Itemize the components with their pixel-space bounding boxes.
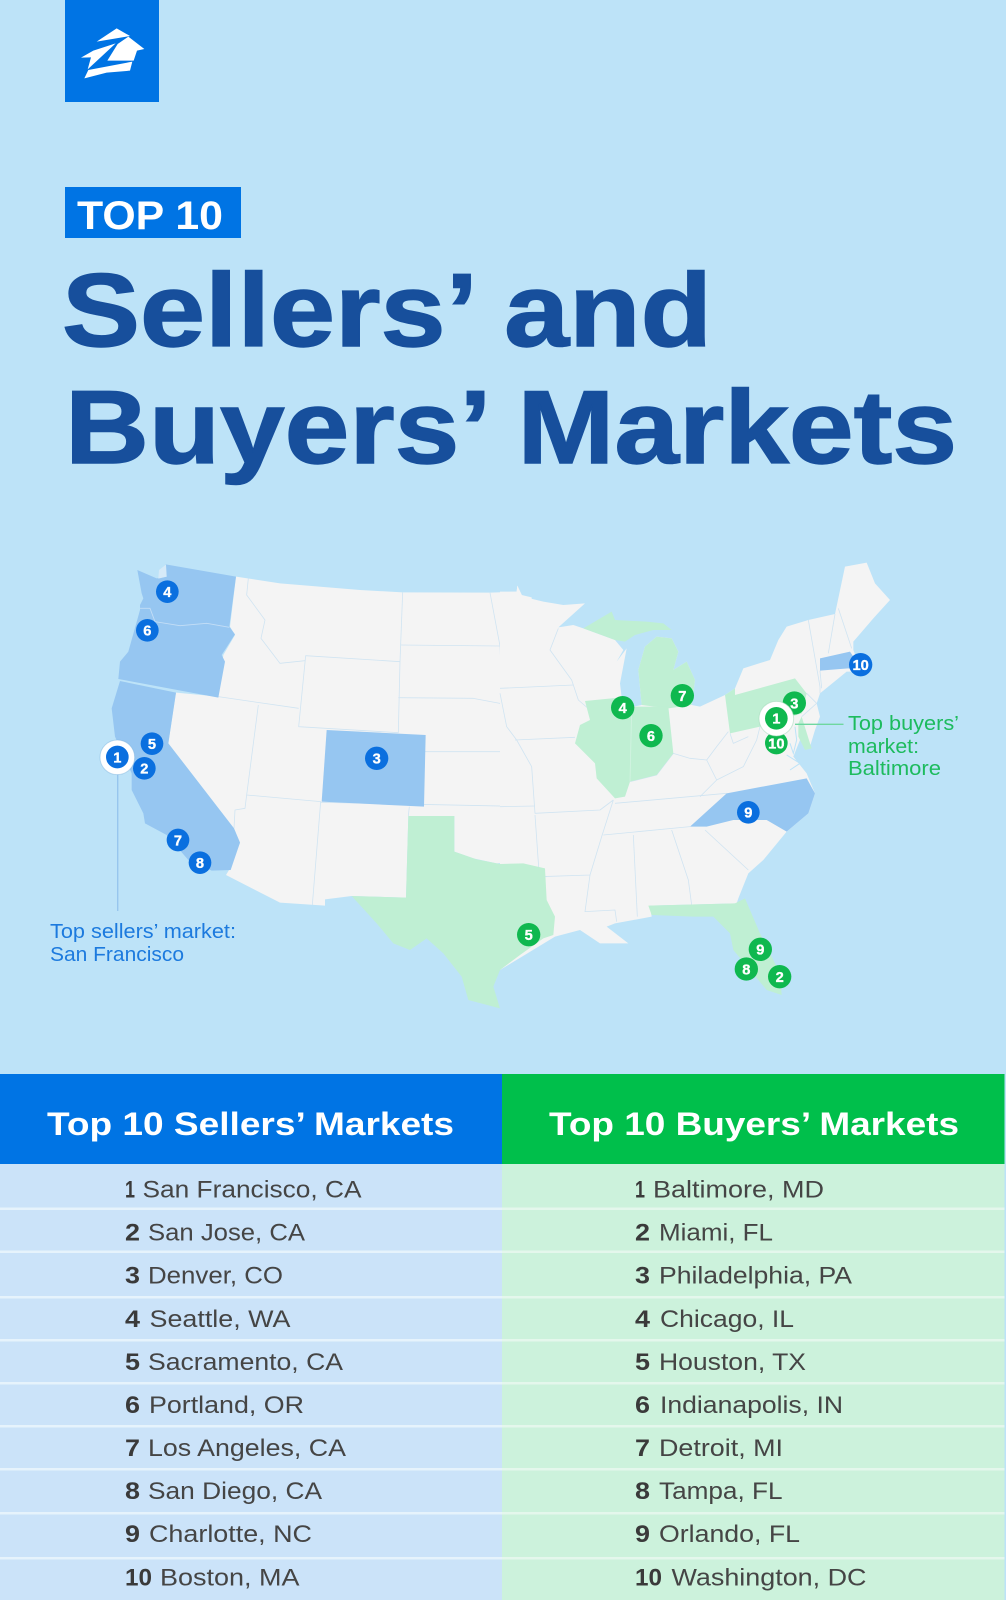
pins: buyers' markets: 1	[772, 712, 780, 728]
pins: sellers' markets: 4	[163, 585, 172, 601]
pins: sellers' markets: 6	[143, 624, 151, 640]
pins: sellers' markets: 5	[148, 737, 156, 753]
list: sellers' markets: 4	[125, 1306, 141, 1333]
list: sellers' markets: San Jose, CA	[148, 1220, 305, 1246]
panel: top 10 sellers' markets table	[0, 1074, 502, 1600]
list: sellers' markets: Charlotte, NC	[149, 1521, 312, 1548]
heading: sellers: Top 10 Sellers’ Markets	[47, 1106, 454, 1142]
map: western states	[112, 564, 532, 906]
list: buyers' markets: Indianapolis, IN	[660, 1392, 843, 1419]
pins: buyers' markets: 3	[790, 696, 798, 712]
heading: buyers: Top 10 Buyers’ Markets	[549, 1106, 959, 1142]
list: buyers' markets: 8	[635, 1478, 650, 1505]
callout line: top sellers' market	[117, 773, 119, 911]
state: Washington and Oregon	[118, 564, 236, 698]
pins: sellers' markets: 8	[196, 856, 204, 872]
pins: eastern sellers' markets	[737, 653, 872, 824]
callout label: top buyers' market: market:	[848, 736, 919, 758]
list: sellers' markets	[125, 1176, 362, 1592]
pins: sellers' markets	[100, 580, 388, 874]
heading: buyers	[502, 1074, 1004, 1164]
state: North Carolina	[690, 778, 815, 832]
list: buyers' markets: Houston, TX	[659, 1349, 806, 1376]
callout line: top buyers' market	[795, 723, 844, 725]
list: sellers' markets: 10	[125, 1564, 152, 1592]
pins: buyers' markets: 5	[525, 928, 533, 944]
pins: buyers' markets: 9	[756, 943, 764, 959]
map: eastern states	[500, 563, 890, 995]
list: sellers' markets: 5	[125, 1349, 140, 1376]
pins: eastern sellers' markets: 10	[853, 658, 869, 674]
list: buyers' markets: Detroit, MI	[659, 1435, 783, 1462]
badge: TOP 10: TOP 10	[77, 194, 223, 238]
list: buyers' markets: 7	[635, 1435, 650, 1462]
state: Texas	[352, 816, 555, 1008]
list: sellers' markets: Seattle, WA	[150, 1306, 290, 1333]
pins: buyers' markets: 4	[619, 701, 628, 717]
state: Delaware and eastern Maryland	[798, 717, 812, 750]
list: sellers' markets: Sacramento, CA	[148, 1349, 343, 1376]
map of the United States	[50, 563, 959, 1008]
list: buyers' markets: 2	[635, 1220, 650, 1246]
state: Pennsylvania	[725, 678, 807, 733]
logo: Zillow house Z	[65, 0, 159, 102]
list: buyers' markets: 1	[635, 1176, 645, 1204]
pins: sellers' markets: 3	[373, 752, 381, 768]
list: sellers' markets: 2	[125, 1220, 140, 1246]
state: Massachusetts	[820, 652, 860, 671]
pins: buyers' markets: 10	[768, 736, 784, 752]
list: sellers' markets: Denver, CO	[148, 1262, 283, 1290]
list: sellers' markets: San Diego, CA	[148, 1478, 322, 1505]
state: Colorado	[322, 730, 426, 807]
list: buyers' markets: Tampa, FL	[659, 1478, 782, 1505]
callout label: top sellers' market: Top sellers’ market:	[50, 921, 236, 943]
list: sellers' markets: 1	[125, 1176, 135, 1204]
list: buyers' markets: Miami, FL	[659, 1220, 773, 1246]
list: sellers' markets: Los Angeles, CA	[148, 1435, 346, 1462]
list: buyers' markets: Baltimore, MD	[653, 1176, 824, 1204]
callout label: top buyers' market	[848, 713, 959, 780]
list: buyers' markets: 3	[635, 1262, 650, 1290]
list: sellers' markets: 7	[125, 1435, 140, 1462]
callout label: top sellers' market: San Francisco	[50, 944, 184, 966]
list: sellers' markets: Boston, MA	[160, 1564, 300, 1592]
list: buyers' markets: 9	[635, 1521, 650, 1548]
panel: top 10 buyers' markets table	[502, 1074, 1004, 1600]
list: sellers' markets: Portland, OR	[149, 1392, 304, 1419]
list: buyers' markets: Washington, DC	[672, 1564, 866, 1592]
title	[62, 253, 957, 486]
pins: buyers' markets: 7	[678, 689, 686, 705]
state: Florida	[648, 898, 782, 995]
list: buyers' markets: 10	[635, 1564, 662, 1592]
state: Michigan lower peninsula	[638, 637, 695, 708]
title: Sellers’ and	[62, 253, 712, 369]
list: sellers' markets: San Francisco, CA	[142, 1176, 362, 1204]
pins: buyers' markets	[517, 684, 806, 988]
pins: buyers' markets: 6	[647, 729, 655, 745]
list: buyers' markets: 4	[635, 1306, 651, 1333]
pins: buyers' markets: 8	[742, 962, 750, 978]
badge: TOP 10	[65, 187, 241, 238]
list: sellers' markets: 9	[125, 1521, 140, 1548]
title: Buyers’ Markets	[65, 370, 957, 486]
list: buyers' markets: Chicago, IL	[660, 1306, 794, 1333]
list: buyers' markets: Philadelphia, PA	[659, 1262, 852, 1290]
list: buyers' markets: 5	[635, 1349, 650, 1376]
heading: sellers	[0, 1074, 502, 1164]
list: sellers' markets: 6	[125, 1392, 140, 1419]
list: sellers' markets: 3	[125, 1262, 140, 1290]
pins: eastern sellers' markets: 9	[744, 806, 752, 822]
list: buyers' markets: 6	[635, 1392, 650, 1419]
callout label: top buyers' market: Baltimore	[848, 758, 941, 780]
pins: sellers' markets: 7	[174, 833, 182, 849]
pins: buyers' markets: 2	[776, 970, 784, 986]
list: buyers' markets	[635, 1176, 866, 1592]
list: buyers' markets: Orlando, FL	[659, 1521, 800, 1548]
state: Illinois and Indiana	[575, 697, 673, 798]
callout label: top sellers' market	[50, 921, 236, 966]
list: sellers' markets: 8	[125, 1478, 140, 1505]
pins: sellers' markets: 1	[113, 750, 121, 766]
pins: sellers' markets: 2	[140, 762, 148, 778]
state: California	[112, 681, 240, 871]
callout label: top buyers' market: Top buyers’	[848, 713, 959, 735]
state: Michigan upper peninsula	[583, 612, 672, 642]
